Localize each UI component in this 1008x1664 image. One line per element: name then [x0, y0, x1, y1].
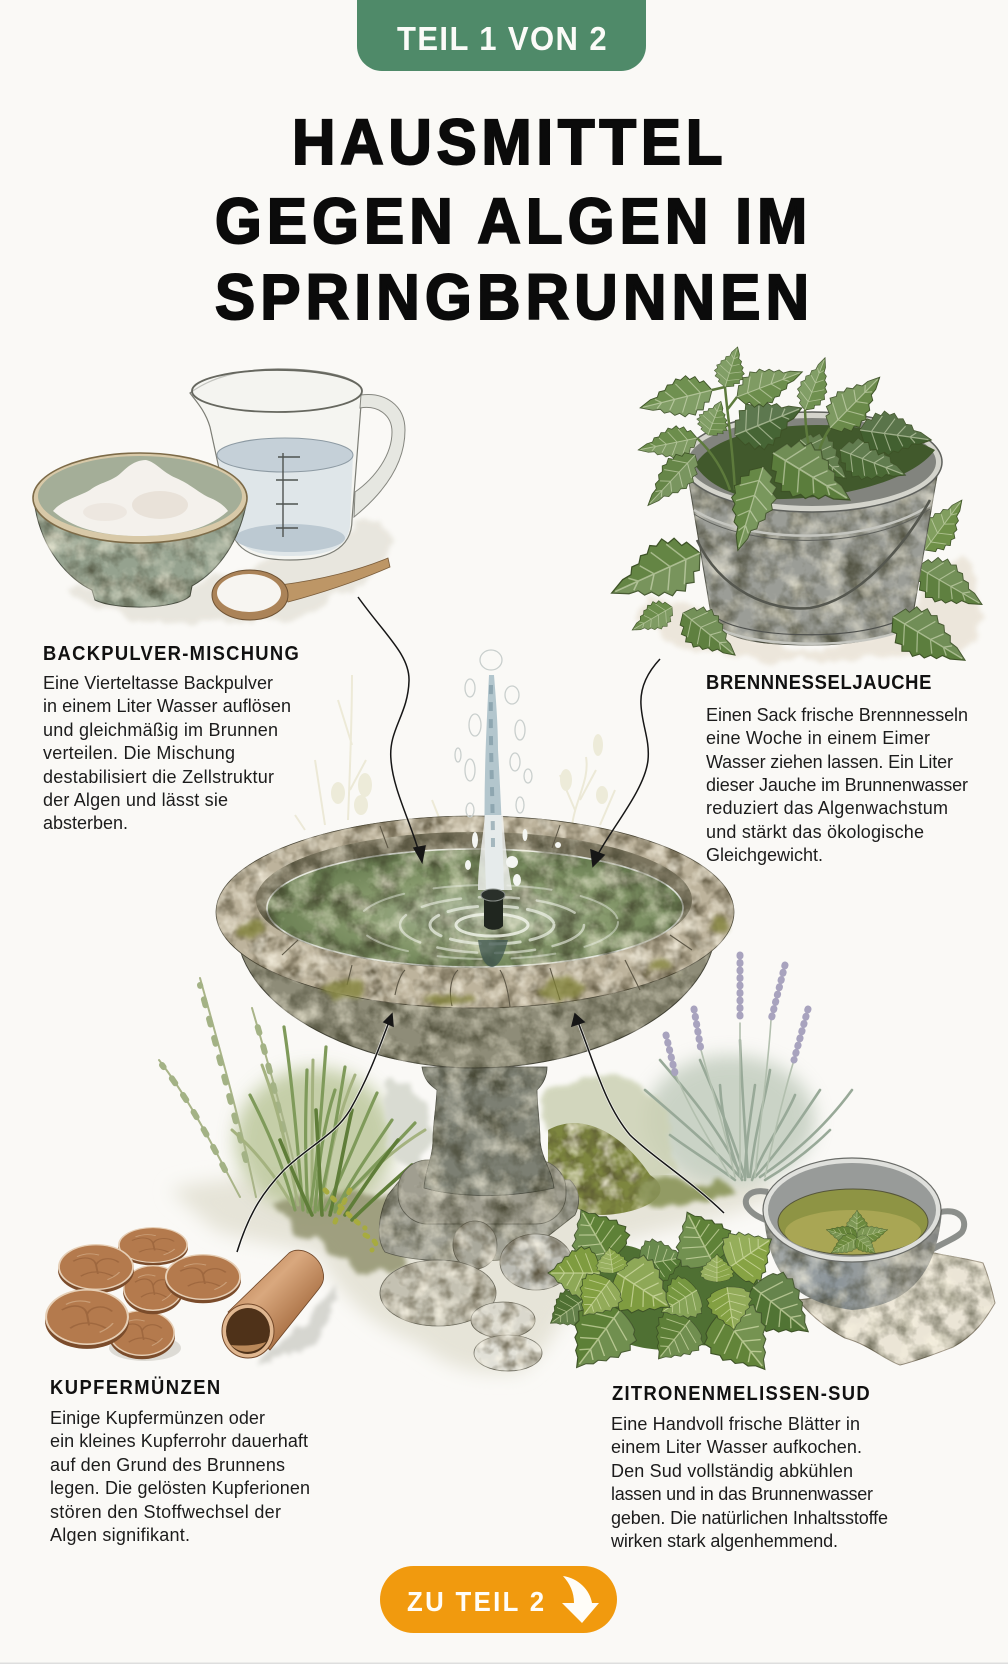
text block: Kupfermünzen: ein kleines Kupferrohr dauerhaft [50, 1431, 308, 1451]
text block: Zitronenmelissen-Sud: einem Liter Wasser aufkochen. [611, 1437, 862, 1457]
title: SPRINGBRUNNEN [215, 262, 809, 333]
icon: bucket body [682, 412, 942, 645]
icon: bucket handle [697, 500, 930, 608]
title [215, 107, 809, 333]
arrow: melisse to bowl [572, 1014, 724, 1213]
text block: Kupfermünzen: KUPFERMÜNZEN [50, 1377, 220, 1399]
text block: Kupfermünzen: legen. Die gelösten Kupferionen [50, 1478, 310, 1498]
title: HAUSMITTEL [292, 107, 723, 178]
text block: Kupfermünzen: auf den Grund des Brunnens [50, 1455, 285, 1475]
pedestal column [422, 1067, 554, 1196]
text block: Backpulver-Mischung [43, 643, 299, 833]
illustration: nettles in a zinc bucket [600, 342, 993, 681]
text block: Brennnesseljauche: Gleichgewicht. [706, 845, 823, 865]
text block: Backpulver-Mischung: BACKPULVER-MISCHUNG [43, 643, 299, 665]
text block: Brennnesseljauche: Einen Sack frische Brennnesseln [706, 705, 968, 725]
pipe shadow [260, 1285, 338, 1362]
title: GEGEN ALGEN IM [215, 186, 807, 257]
text block: Kupfermünzen: stören den Stoffwechsel der [50, 1502, 281, 1522]
text block: Zitronenmelissen-Sud: Eine Handvoll frische Blätter in [611, 1414, 860, 1434]
base ring [398, 1160, 566, 1224]
nozzle [481, 889, 505, 930]
text block: Brennnesseljauche: dieser Jauche im Brunnenwasser [706, 775, 968, 795]
rocks [380, 1221, 572, 1371]
text block: Backpulver-Mischung: verteilen. Die Mischung [43, 743, 235, 763]
floating leaf in pot [824, 1210, 890, 1261]
icon: pot [746, 1158, 964, 1310]
garden wash and ground [170, 1055, 815, 1373]
text block: Zitronenmelissen-Sud: geben. Die natürlichen Inhaltsstoffe [611, 1508, 888, 1528]
badge: Teil 1 von 2 [357, 0, 646, 71]
lavender plant [645, 955, 852, 1180]
leaves behind bucket [600, 490, 993, 624]
icon: curved down arrow [562, 1576, 599, 1623]
text block: Zitronenmelissen-Sud: lassen und in das Brunnenwasser [611, 1484, 873, 1504]
text block: Kupfermünzen: Algen signifikant. [50, 1525, 190, 1545]
text block: Zitronenmelissen-Sud [610, 1383, 888, 1551]
arrow: kupfer to bowl [237, 1014, 393, 1252]
faint background plants [295, 675, 615, 830]
text block: Backpulver-Mischung: in einem Liter Wasser auflösen [43, 696, 291, 716]
text block: Backpulver-Mischung: der Algen und lässt sie [43, 790, 228, 810]
badge: Teil 1 von 2: TEIL 1 VON 2 [397, 20, 607, 57]
stone rim [216, 816, 734, 1008]
front leaves at bucket foot [625, 595, 978, 681]
illustration: copper coins and pipe [45, 1227, 338, 1362]
shadow wash [70, 520, 390, 623]
icon: green bowl [33, 453, 247, 607]
left grasses and flowering herbs [159, 978, 425, 1250]
lemon balm leaves [539, 1195, 828, 1389]
illustration: baking soda bowl, measuring jug and spoon [33, 369, 405, 623]
arrow: backpulver to water [358, 597, 425, 862]
illustration: lemon balm leaves, pot and cloth [539, 1158, 995, 1389]
text block: Brennnesseljauche: reduziert das Algenwachstum [706, 798, 948, 818]
text block: Brennnesseljauche [706, 672, 968, 865]
ground wash [640, 560, 981, 661]
illustration: stone fountain [216, 650, 734, 1261]
button: Zu Teil 2 [380, 1566, 617, 1633]
inner wall [256, 832, 692, 968]
fountain jet [455, 650, 561, 890]
text block: Brennnesseljauche: und stärkt das ökologische [706, 822, 924, 842]
text block: Zitronenmelissen-Sud: wirken stark algenhemmend. [610, 1531, 838, 1551]
icon: wooden spoon with powder [212, 558, 390, 620]
arrow: brennnessel to water [591, 659, 660, 866]
text block: Zitronenmelissen-Sud: ZITRONENMELISSEN-SUD [612, 1383, 870, 1405]
icon: copper coins [45, 1227, 241, 1361]
text block: Zitronenmelissen-Sud: Den Sud vollständig abkühlen [611, 1461, 853, 1481]
rim stone joints and moss [241, 825, 729, 1007]
text block: Backpulver-Mischung: absterben. [43, 813, 128, 833]
text block: Backpulver-Mischung: Eine Vierteltasse Backpulver [43, 673, 273, 693]
icon: copper pipe [222, 1250, 324, 1358]
icon: measuring jug [190, 369, 405, 560]
top nettle leaves [635, 342, 934, 557]
text block: Brennnesseljauche: eine Woche in einem Eimer [706, 728, 930, 748]
text block: Brennnesseljauche: Wasser ziehen lassen. Ein Liter [706, 752, 953, 772]
text block: Kupfermünzen [50, 1377, 310, 1545]
text block: Backpulver-Mischung: und gleichmäßig im Brunnen [43, 720, 278, 740]
icon: cloth [798, 1252, 995, 1365]
text block: Brennnesseljauche: BRENNNESSELJAUCHE [706, 672, 932, 694]
water surface [267, 849, 683, 967]
plinth [379, 1180, 579, 1261]
text block: Kupfermünzen: Einige Kupfermünzen oder [50, 1408, 265, 1428]
text block: Backpulver-Mischung: destabilisiert die Zellstruktur [43, 767, 274, 787]
button: Zu Teil 2: ZU TEIL 2 [407, 1586, 544, 1617]
bowl underside [240, 950, 712, 1068]
